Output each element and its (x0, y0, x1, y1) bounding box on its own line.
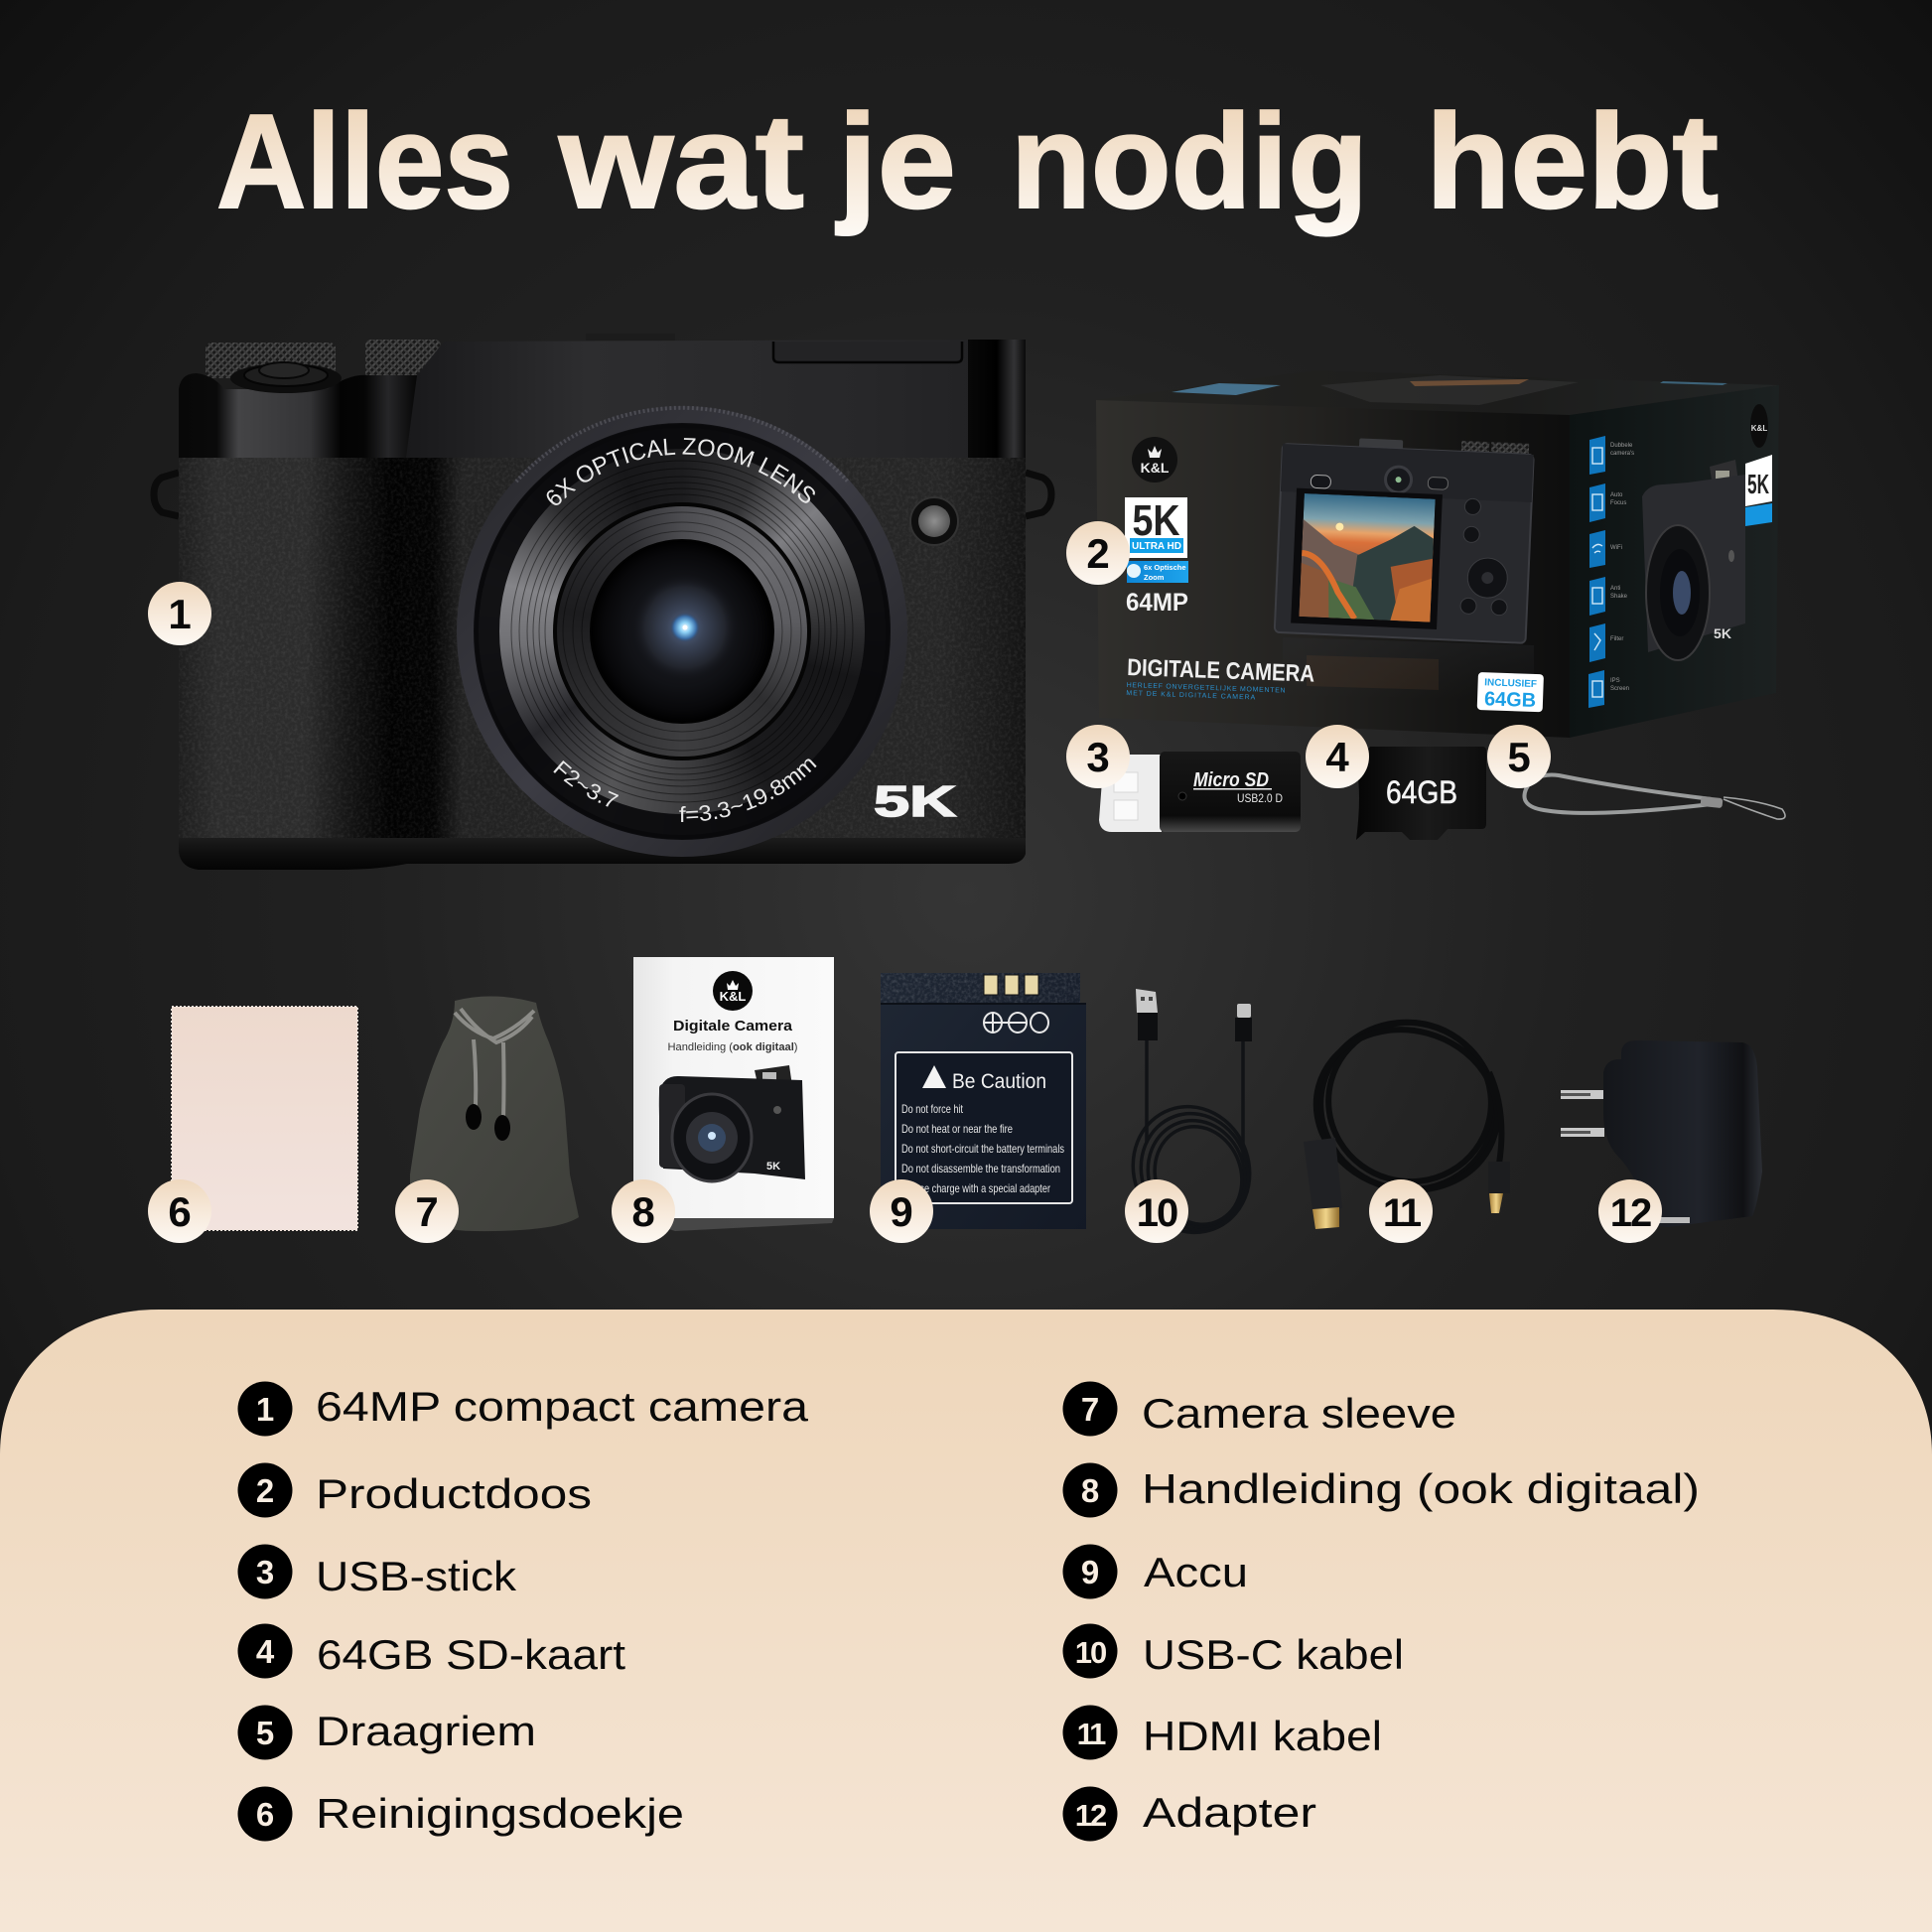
battery contacts (984, 975, 1038, 995)
camera buttons (1460, 498, 1512, 616)
top plate (397, 340, 1026, 458)
box front face (1096, 400, 1570, 738)
item 3: USB card reader: USB2.0 D (1237, 791, 1283, 805)
mini connector (1488, 1162, 1510, 1213)
number badges on products: 11 (1383, 1191, 1422, 1235)
camera screen (1291, 488, 1443, 629)
list right column: USB-C kabel (1143, 1631, 1404, 1678)
item 9: battery: Be Caution (952, 1070, 1046, 1093)
number badges on products: 6 (168, 1188, 192, 1235)
item 7: camera sleeve (410, 996, 579, 1231)
camera back illustration (1275, 433, 1534, 643)
side camera illustration: 5K (1714, 625, 1731, 641)
side logo: K&L (1751, 424, 1767, 433)
list right column: 11 (1077, 1717, 1106, 1751)
item 9: battery: Do not heat or near the fire (901, 1122, 1013, 1136)
list right column: 8 (1081, 1472, 1099, 1509)
64MP label: 64MP (1126, 589, 1188, 617)
manual camera image: 5K (766, 1161, 780, 1173)
5K ultra HD tag: Zoom (1144, 573, 1165, 582)
list right column: HDMI kabel (1143, 1713, 1382, 1759)
hot shoe (586, 334, 675, 341)
number badges on products: 4 (1325, 734, 1349, 780)
box title: MET DE K&L DIGITALE CAMERA (1126, 690, 1256, 702)
prongs (1561, 1090, 1604, 1137)
box title (1126, 654, 1315, 704)
K&L logo: K&L (1141, 460, 1170, 476)
inclusief 64GB tag: 64GB (1484, 688, 1536, 712)
item 9: battery (881, 973, 1086, 1229)
item 9: battery: Do not disassemble the transformation (901, 1162, 1060, 1175)
camera reflection (1283, 637, 1534, 700)
item 9: battery: Please charge with a special adapter (901, 1181, 1050, 1195)
manual camera image (659, 1065, 805, 1181)
lens inner ring (553, 502, 811, 760)
item 2: product box (1096, 370, 1779, 738)
5K ultra HD tag: ULTRA HD (1132, 541, 1181, 552)
list right column: Accu (1144, 1549, 1248, 1595)
AF lamp (910, 497, 958, 545)
grip top (179, 373, 417, 458)
side 5K tag: 5K (1747, 469, 1769, 499)
list right column: 7 (1081, 1391, 1099, 1428)
5K ultra HD tag: 6x Optische (1144, 563, 1186, 572)
number badges on products (148, 521, 1662, 1243)
list right column: 10 (1075, 1635, 1106, 1670)
item 6: cleaning cloth (172, 1007, 357, 1230)
number badges on products: 7 (415, 1188, 439, 1235)
drawstring (455, 1009, 534, 1120)
lens text (546, 438, 816, 822)
list left column: Draagriem (316, 1708, 536, 1754)
box top (1096, 370, 1779, 415)
title: je (835, 86, 956, 236)
strap lugs (154, 473, 1051, 516)
list right column: Camera sleeve (1142, 1390, 1456, 1437)
list left column: 5 (256, 1715, 274, 1751)
flash window (773, 342, 962, 362)
lens glass (631, 574, 739, 681)
side feature icons: Auto (1610, 492, 1623, 498)
shutter button (230, 362, 342, 393)
item 4: 64GB SD card: 64GB (1386, 774, 1457, 810)
list right column: Handleiding (ook digitaal) (1142, 1465, 1700, 1512)
dials (206, 340, 441, 379)
side feature icons: Screen (1610, 686, 1629, 692)
battery symbols (984, 1013, 1048, 1033)
USB-A plug (1136, 989, 1158, 1040)
cord beads (466, 1104, 482, 1130)
right edge strip (968, 340, 1026, 458)
HDMI plug (1304, 1138, 1342, 1229)
number badges on products: 9 (890, 1188, 913, 1235)
side feature icons: Dubbele (1610, 443, 1633, 449)
bottom band (179, 838, 1026, 870)
list left column: 4 (256, 1633, 275, 1670)
item 1: compact camera (151, 340, 1054, 870)
number badges on products: 10 (1137, 1191, 1177, 1235)
side 5K tag (1745, 455, 1772, 526)
number badges on products: 2 (1086, 530, 1110, 577)
side feature icons: Shake (1610, 594, 1628, 600)
title: hebt (1426, 86, 1719, 236)
list left column: USB-stick (316, 1553, 517, 1599)
lens shiny surface (479, 428, 886, 835)
number badges on products: 1 (168, 591, 192, 637)
box title: DIGITALE CAMERA (1127, 654, 1315, 688)
item 4: 64GB SD card (1356, 747, 1486, 840)
title: wat (558, 86, 804, 236)
lens text: 6X OPTICAL ZOOM LENS (546, 438, 815, 505)
side feature icons: IPS (1610, 678, 1620, 684)
side feature icons: Filter (1610, 636, 1623, 642)
item 8: manual: Digitale Camera (673, 1018, 793, 1035)
list right column (1062, 1382, 1700, 1841)
USB-C plug (1235, 1004, 1252, 1041)
list left column: 6 (256, 1796, 274, 1833)
lens outer ring (457, 406, 907, 857)
number badges on products: 5 (1507, 734, 1531, 780)
lens text: f=3.3~19.8mm (679, 759, 816, 822)
number badges on products: 8 (631, 1188, 655, 1235)
side camera illustration (1642, 460, 1745, 660)
item 12: adapter (1561, 1040, 1762, 1227)
list right column: 12 (1075, 1798, 1106, 1833)
list left column: 1 (256, 1391, 274, 1428)
side feature icons: camera's (1610, 451, 1634, 457)
5K ultra HD tag: 5K (1132, 496, 1180, 545)
list right column: Adapter (1143, 1789, 1316, 1836)
title: Alles (216, 86, 513, 236)
item 8: manual (633, 957, 834, 1231)
list left column: 3 (256, 1554, 274, 1590)
leather grain (179, 458, 1026, 840)
title (216, 86, 1719, 236)
side logo (1750, 404, 1768, 448)
box title: HERLEEF ONVERGETELIJKE MOMENTEN (1127, 682, 1286, 695)
number badges on products: 12 (1610, 1191, 1651, 1235)
item 8: manual: K&L (720, 989, 746, 1004)
title: nodig (1011, 86, 1368, 236)
item 10: USB-C cable (1116, 989, 1267, 1249)
side feature icons (1588, 436, 1634, 708)
list left column: 64GB SD-kaart (317, 1631, 625, 1678)
list left column (238, 1382, 809, 1841)
item 8: manual: Handleiding (ook digitaal) (667, 1041, 798, 1053)
side feature icons: Focus (1610, 500, 1626, 506)
list left column: 2 (256, 1472, 274, 1509)
inclusief 64GB tag: INCLUSIEF (1484, 677, 1537, 690)
list right column: 9 (1081, 1554, 1099, 1590)
5K ultra HD tag (1125, 496, 1188, 583)
list left column: 64MP compact camera (316, 1383, 809, 1430)
item 5: wrist strap (1524, 775, 1785, 819)
item 11: HDMI cable (1298, 1003, 1516, 1229)
lens (457, 405, 907, 857)
item 9: battery: Do not short-circuit the battery terminals (901, 1142, 1064, 1156)
side feature icons: Anti (1610, 586, 1620, 592)
list left column: Productdoos (316, 1470, 592, 1517)
side feature icons: WiFi (1610, 545, 1622, 551)
panel: contents list (0, 1310, 1932, 1932)
K&L logo (1132, 437, 1177, 483)
lens text: F2~3.7 (553, 760, 620, 807)
box right face (1570, 385, 1779, 738)
item 9: battery: Do not force hit (901, 1102, 964, 1116)
caution label (896, 1052, 1072, 1203)
leather body (179, 458, 1026, 840)
lens barrel (591, 540, 773, 723)
list left column: Reinigingsdoekje (316, 1790, 684, 1837)
item 3: USB card reader: Micro SD (1193, 769, 1269, 791)
item 3: USB card reader (1099, 752, 1301, 832)
inclusief 64GB tag (1477, 672, 1544, 712)
number badges on products: 3 (1086, 734, 1110, 780)
5K label: 5K (874, 777, 956, 826)
